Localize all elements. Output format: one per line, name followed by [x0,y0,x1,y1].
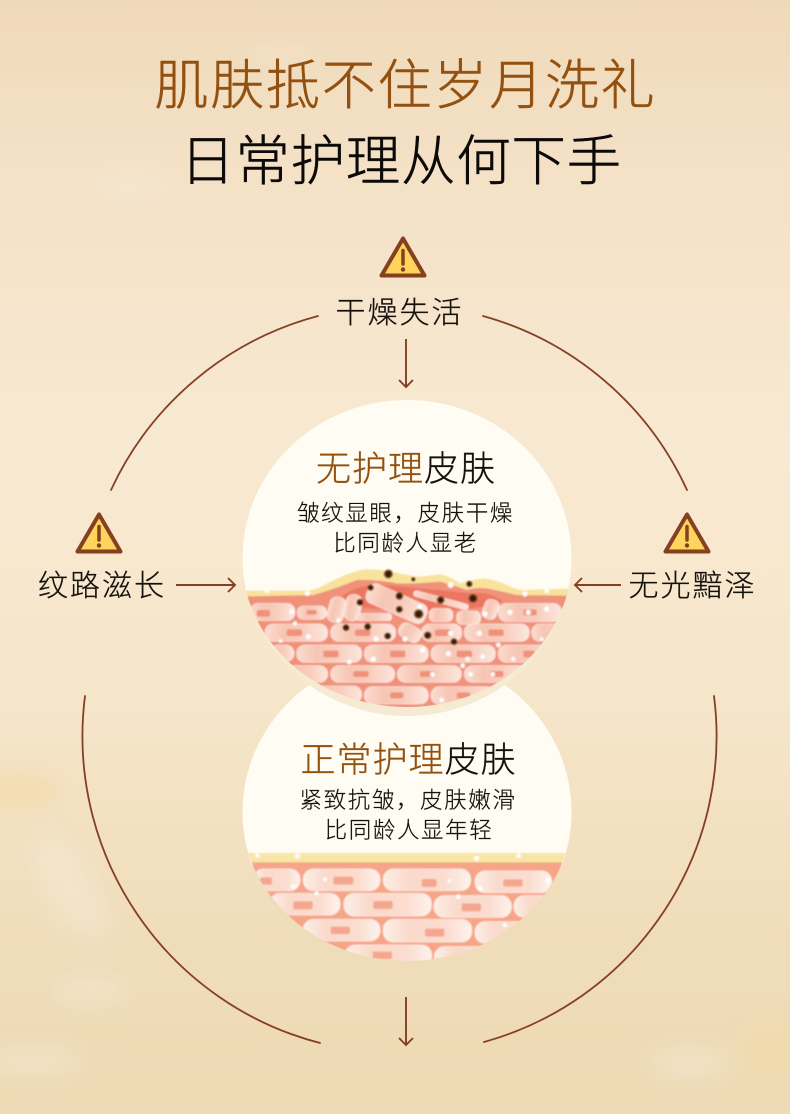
label: dry: 干燥失活 [336,297,464,330]
title line 2: 日常护理从何下手 [180,131,622,192]
panel: no care skin [240,400,580,716]
arrow: lines to skin [176,578,235,592]
heading: no care: 无护理皮肤 [316,450,496,489]
text: no care problems: 皱纹显眼，皮肤干燥 [297,501,514,526]
warning: dry [382,238,424,276]
illustration: healthy skin cross-section [248,852,566,961]
surrounding ring arcs [82,316,717,1043]
text: no care problems [297,501,514,556]
arrow: bottom [399,997,413,1045]
text: normal care benefits [300,788,516,843]
panel: normal care skin [242,685,572,961]
text: normal care benefits: 紧致抗皱，皮肤嫩滑 [300,788,516,813]
illustration: damaged skin cross-section [240,569,580,710]
arrow: dull to skin [575,578,621,592]
label: dull: 无光黯泽 [628,570,756,603]
text: normal care benefits: 比同龄人显年轻 [325,818,493,843]
heading: normal care: 正常护理皮肤 [300,741,517,780]
warning: dull [666,514,708,552]
arrow: dry to skin [399,339,413,387]
label: lines: 纹路滋长 [38,570,166,603]
warning: lines [78,514,120,552]
title line 1: 肌肤抵不住岁月洗礼 [154,56,657,116]
text: no care problems: 比同龄人显老 [333,531,478,556]
